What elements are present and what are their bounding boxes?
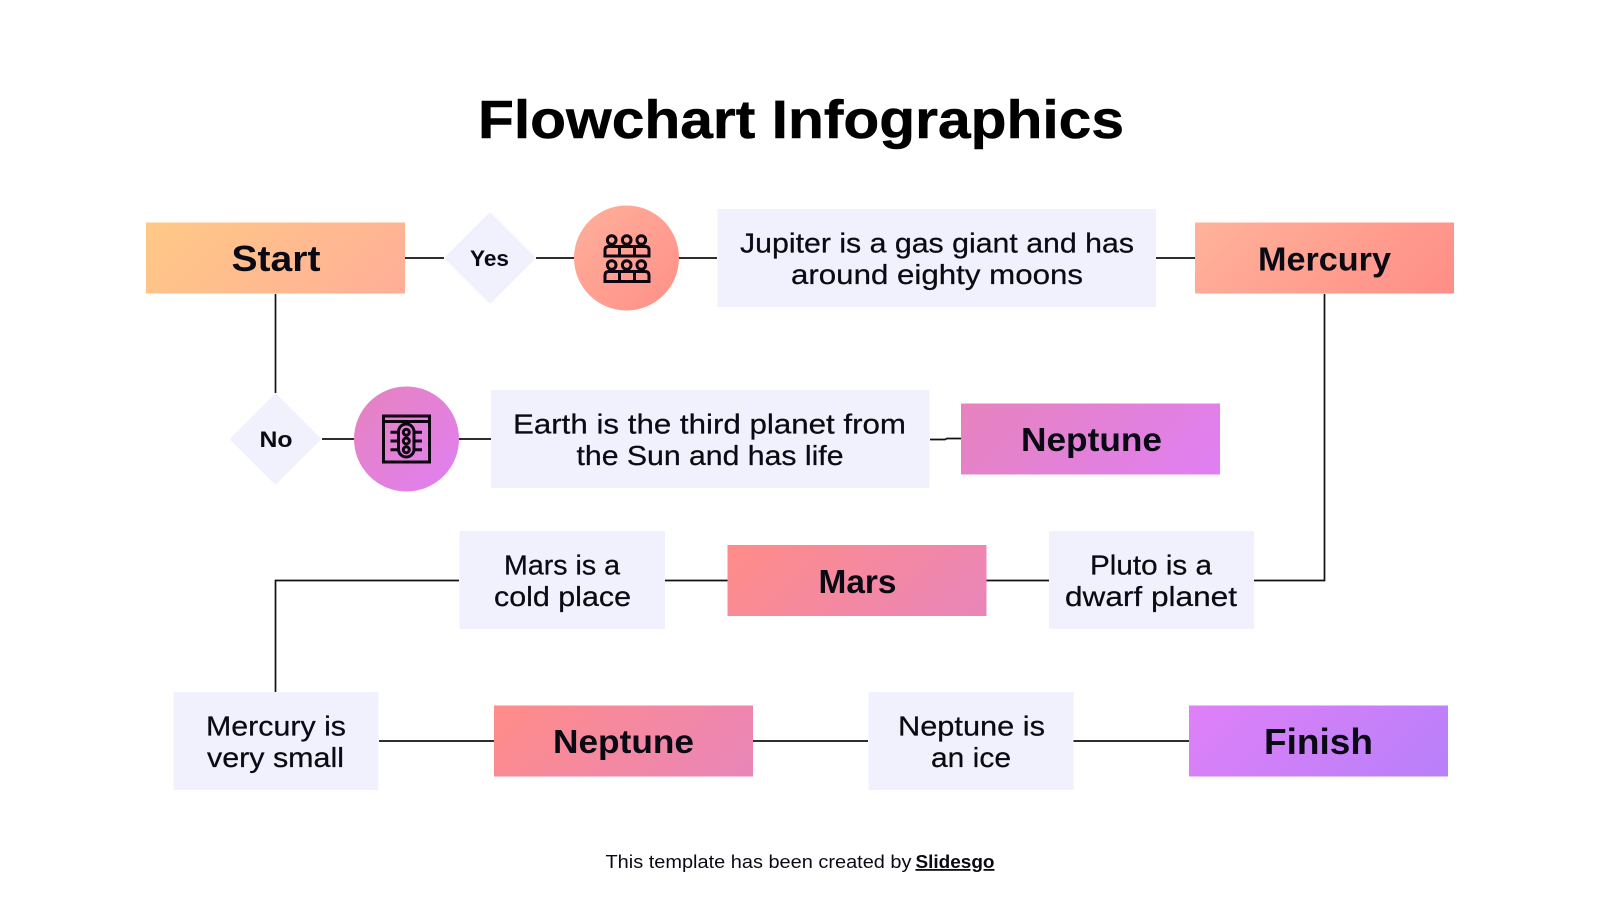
text box: Neptune: an ice <box>931 742 1011 773</box>
text box: Mercury: Mercury is <box>206 710 346 742</box>
text box: Mars: cold place <box>494 581 631 612</box>
decision: Yes <box>444 212 536 304</box>
node: Mars <box>728 545 986 616</box>
node: Neptune (row 2) <box>961 404 1220 474</box>
text box: Mercury <box>174 692 378 790</box>
node: Mars: Mars <box>818 563 896 600</box>
node: Neptune (row 4) <box>494 706 753 776</box>
icon: audience in circle <box>574 206 679 310</box>
node: Neptune (row 2): Neptune <box>1021 421 1162 458</box>
text box: Neptune: Neptune is <box>898 710 1045 742</box>
decision: Yes: Yes <box>470 246 509 271</box>
text box: Mercury: very small <box>207 742 344 773</box>
text box: Earth <box>491 390 930 488</box>
decision: No: No <box>260 427 292 452</box>
decision: No <box>230 393 322 485</box>
node: Mercury <box>1195 222 1454 294</box>
footer credit: Slidesgo <box>916 852 995 872</box>
text box: Jupiter: Jupiter is a gas giant and has <box>740 228 1134 258</box>
title: Flowchart Infographics <box>478 90 1124 150</box>
text box: Jupiter: around eighty moons <box>791 259 1083 290</box>
text box: Mars: Mars is a <box>504 550 620 580</box>
node: Finish <box>1189 706 1448 776</box>
node: Mercury: Mercury <box>1258 240 1392 278</box>
icon: traffic light in circle <box>354 386 459 492</box>
text box: Earth: the Sun and has life <box>576 440 844 471</box>
text box: Jupiter <box>718 209 1156 307</box>
node: Start: Start <box>232 238 320 279</box>
node: Neptune (row 4): Neptune <box>553 723 694 760</box>
node: Start <box>146 222 405 294</box>
connector lines <box>276 258 1324 741</box>
text box: Pluto: Pluto is a <box>1090 550 1212 580</box>
footer credit: This template has been created by <box>606 852 912 872</box>
text box: Earth: Earth is the third planet from <box>513 408 906 440</box>
text box: Neptune <box>868 692 1074 790</box>
node: Finish: Finish <box>1264 721 1373 762</box>
text box: Pluto <box>1049 531 1254 629</box>
text box: Mars <box>460 531 665 629</box>
text box: Pluto: dwarf planet <box>1065 581 1237 612</box>
